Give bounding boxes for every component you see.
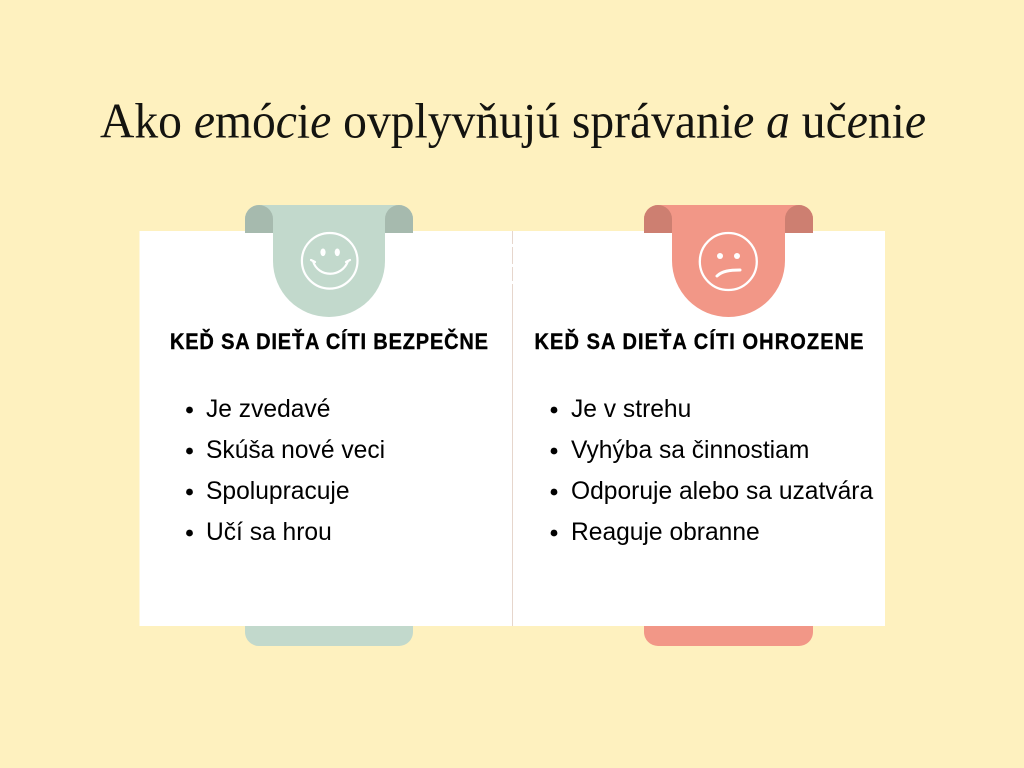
title: Ako emócie ovplyvňujú správanie a učenie bbox=[100, 92, 926, 148]
icon: worried face bbox=[700, 233, 757, 290]
green ribbon front bbox=[273, 205, 385, 317]
list: threatened behaviours: Reaguje obranne bbox=[571, 519, 760, 546]
green ribbon left fold bbox=[245, 205, 273, 233]
list: safe behaviours bbox=[186, 396, 385, 546]
green ribbon right fold bbox=[385, 205, 413, 233]
panel: safe child column bbox=[170, 205, 488, 546]
red ribbon front bbox=[672, 205, 785, 317]
heading: safe: KEĎ SA DIEŤA CÍTI BEZPEČNE bbox=[170, 329, 488, 354]
green ribbon bottom tab bbox=[245, 620, 413, 646]
red ribbon top band bbox=[644, 205, 813, 233]
red ribbon left fold bbox=[644, 205, 672, 233]
panel: white card bbox=[140, 231, 885, 626]
list: threatened behaviours: Vyhýba sa činnostiam bbox=[571, 437, 809, 464]
green ribbon top band bbox=[245, 205, 413, 233]
list: threatened behaviours bbox=[551, 396, 873, 546]
list: threatened behaviours: Odporuje alebo sa uzatvára bbox=[571, 478, 873, 505]
list: threatened behaviours: Je v strehu bbox=[571, 396, 691, 423]
icon: smiling face bbox=[302, 233, 358, 289]
red ribbon right fold bbox=[785, 205, 813, 233]
list: safe behaviours: Učí sa hrou bbox=[206, 519, 332, 546]
red ribbon bottom tab bbox=[644, 620, 813, 646]
list: safe behaviours: Je zvedavé bbox=[206, 396, 330, 423]
heading: threatened: KEĎ SA DIEŤA CÍTI OHROZENE bbox=[534, 329, 863, 354]
list: safe behaviours: Skúša nové veci bbox=[206, 437, 385, 464]
panel: threatened child column bbox=[534, 205, 873, 546]
list: safe behaviours: Spolupracuje bbox=[206, 478, 350, 505]
